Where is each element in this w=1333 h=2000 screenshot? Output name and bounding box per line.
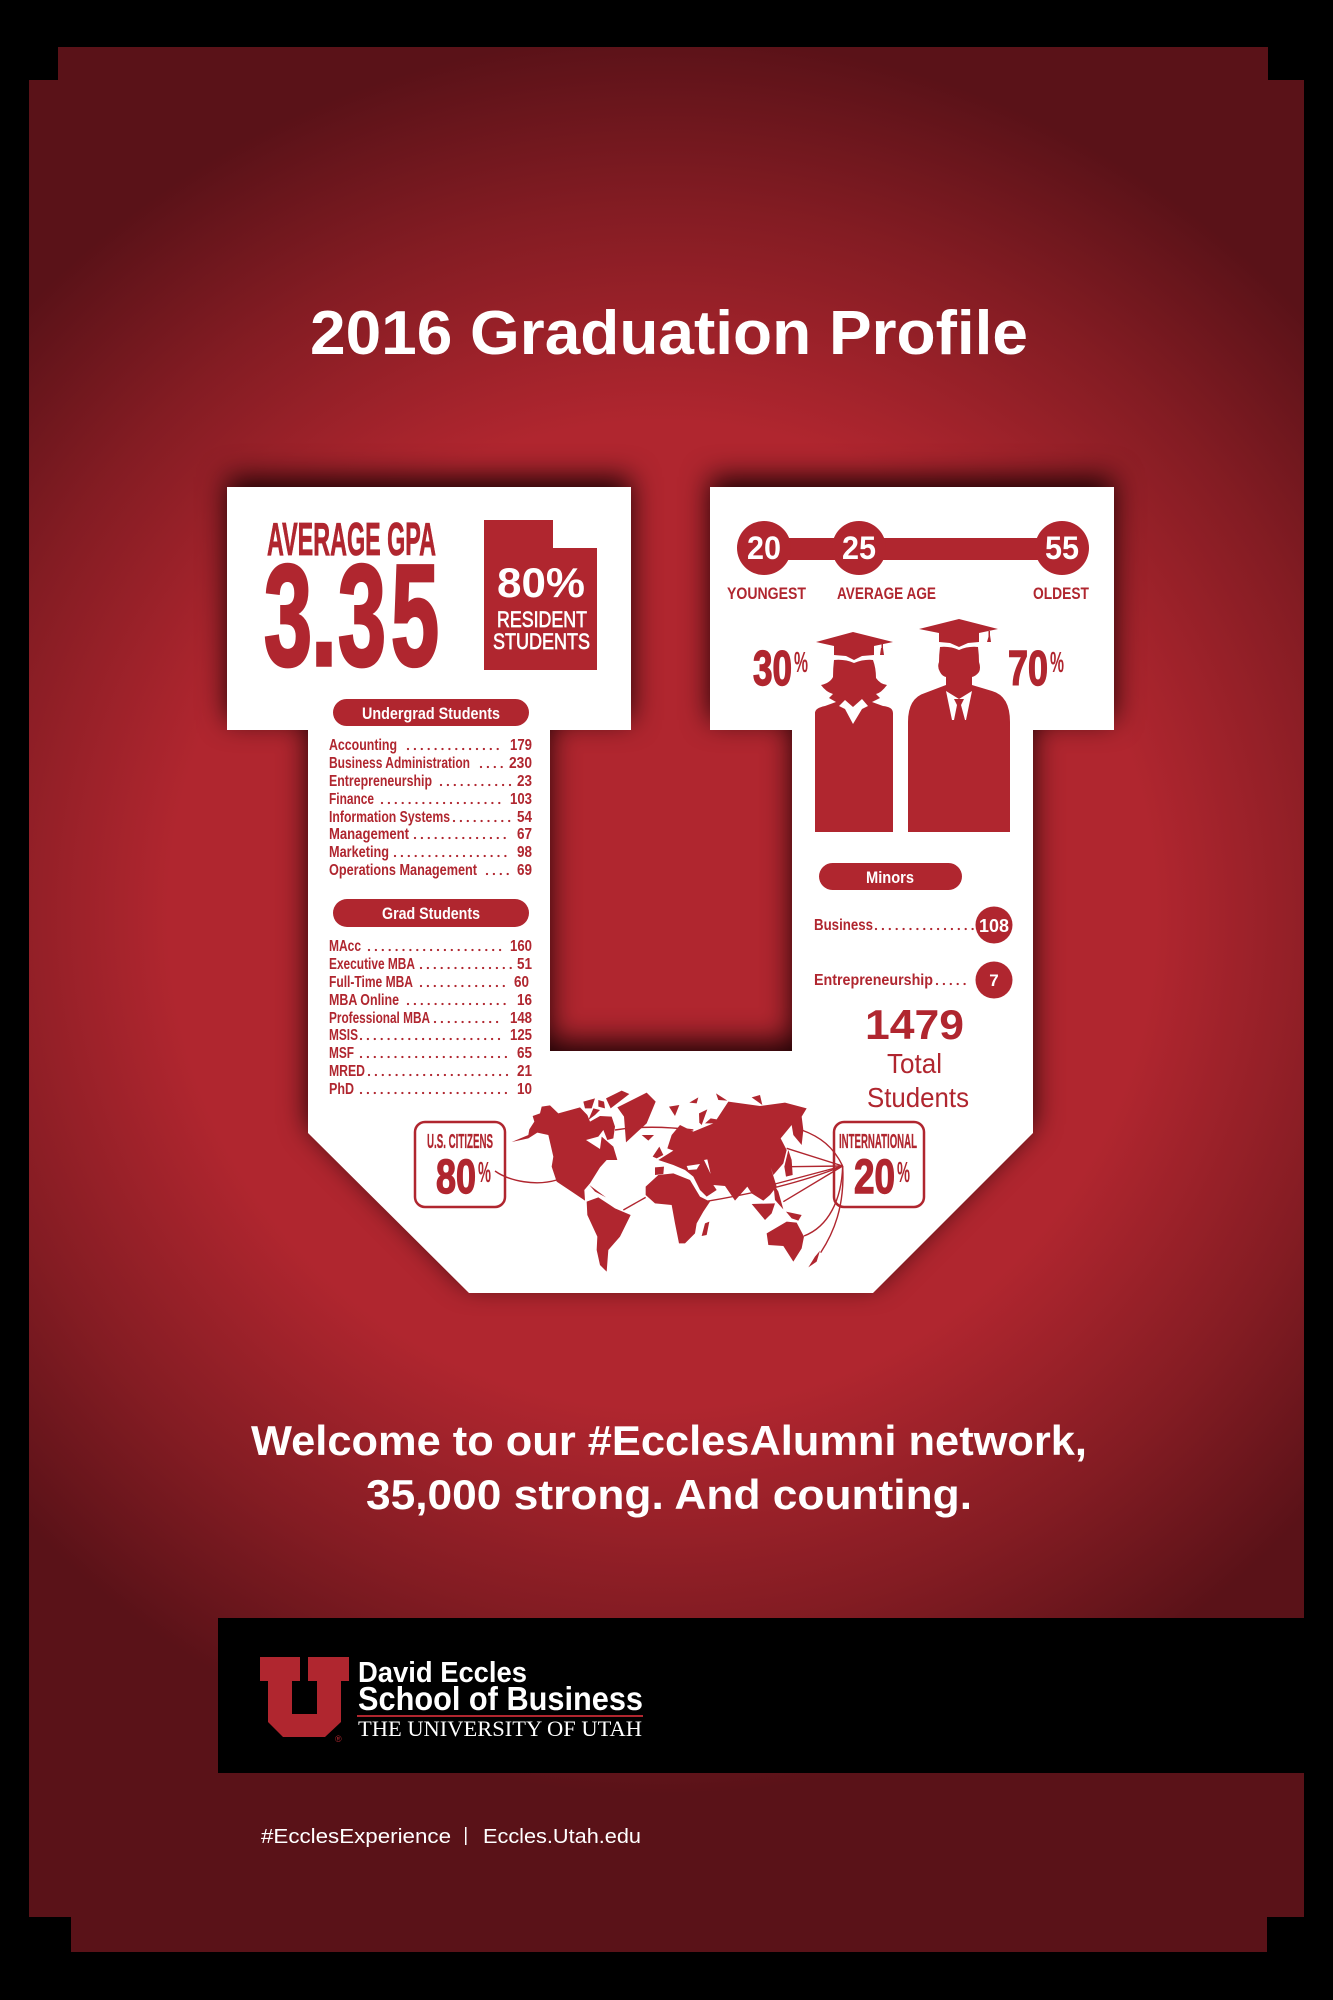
list: grad programs: 148 xyxy=(510,1010,532,1027)
list: undergrad majors: 69 xyxy=(517,862,532,879)
closing message: Welcome to our #EcclesAlumni network, xyxy=(251,1417,1087,1464)
icon: Utah state with resident students: STUDENTS xyxy=(493,629,590,654)
stat: GPA value: 3 xyxy=(338,535,386,696)
closing message xyxy=(251,1417,1087,1518)
chart: age timeline: AVERAGE AGE xyxy=(837,584,936,603)
chart: age timeline: 20 xyxy=(747,530,781,566)
list: undergrad majors: 98 xyxy=(517,844,532,861)
list: undergrad majors: Management xyxy=(329,826,409,843)
list: undergrad majors: 23 xyxy=(517,773,532,790)
list: minors: 108 xyxy=(979,916,1009,936)
list: undergrad majors: 67 xyxy=(517,826,532,843)
callout: international: INTERNATIONAL xyxy=(839,1131,917,1153)
callout: international xyxy=(834,1122,924,1207)
list: undergrad majors: 230 xyxy=(509,755,532,772)
logo wordmark xyxy=(357,1657,643,1741)
stat: 30% women: 30 xyxy=(753,642,792,696)
panel: U shape infographic xyxy=(227,487,1114,1293)
list: grad programs: Professional MBA xyxy=(329,1010,430,1027)
list: minors: Business xyxy=(814,917,873,934)
closing message: 35,000 strong. And counting. xyxy=(366,1471,972,1518)
title: 2016 Graduation Profile xyxy=(310,299,1028,368)
list: minors: Entrepreneurship xyxy=(814,972,933,989)
icon: university U logo xyxy=(260,1657,349,1744)
list: grad programs: MBA Online xyxy=(329,992,399,1009)
list: minors xyxy=(814,906,1012,998)
stat: 70% men: 70 xyxy=(1008,642,1048,696)
list: grad programs: 10 xyxy=(517,1081,532,1098)
heading: grad students: Grad Students xyxy=(382,904,480,923)
icon: Utah state with resident students xyxy=(484,520,597,670)
icon: female graduate xyxy=(815,632,893,832)
stat: GPA value xyxy=(264,535,439,696)
callout: U.S. citizens: 80 xyxy=(436,1151,476,1204)
list: undergrad majors: 54 xyxy=(517,809,532,826)
callout: international: % xyxy=(897,1157,910,1189)
panel: logo band xyxy=(218,1618,1304,1773)
list: undergrad majors: Information Systems xyxy=(329,809,450,826)
callout: U.S. citizens: U.S. CITIZENS xyxy=(427,1131,493,1153)
heading: undergrad students: Undergrad Students xyxy=(362,704,500,723)
list: grad programs: 160 xyxy=(510,938,532,955)
list: undergrad majors: 179 xyxy=(510,737,532,754)
footer links xyxy=(261,1826,641,1848)
callout: U.S. citizens: % xyxy=(478,1157,491,1189)
heading: average GPA: AVERAGE GPA xyxy=(267,513,436,565)
icon: Utah state with resident students: 80% xyxy=(497,559,585,606)
chart: world map with connection lines xyxy=(495,1091,843,1272)
logo wordmark: THE UNIVERSITY OF UTAH xyxy=(358,1716,642,1741)
list: undergrad majors: Finance xyxy=(329,791,374,808)
list: undergrad majors: Accounting xyxy=(329,737,397,754)
list: grad programs: 16 xyxy=(517,992,532,1009)
heading: minors: Minors xyxy=(866,868,914,887)
list: grad programs: 65 xyxy=(517,1045,532,1062)
stat: 70% men: % xyxy=(1050,647,1064,679)
list: grad programs: MAcc xyxy=(329,938,361,955)
stat: 30% women: % xyxy=(794,647,808,679)
list: grad programs: PhD xyxy=(329,1081,354,1098)
logo wordmark: David Eccles xyxy=(358,1657,527,1689)
stat: total students: 1479 xyxy=(865,1001,964,1048)
callout: U.S. citizens xyxy=(415,1122,505,1207)
chart: age timeline: 25 xyxy=(842,530,876,566)
chart: age timeline: YOUNGEST xyxy=(727,584,807,603)
chart: age timeline: OLDEST xyxy=(1033,584,1089,603)
logo wordmark: School of Business xyxy=(358,1680,643,1717)
list: grad programs: 125 xyxy=(510,1027,532,1044)
chart: age timeline: 55 xyxy=(1045,530,1079,566)
list: undergrad majors: Entrepreneurship xyxy=(329,773,432,790)
chart: age timeline xyxy=(727,521,1089,603)
icon: university U logo: ® xyxy=(335,1734,342,1744)
heading: undergrad students xyxy=(333,699,529,726)
list: grad programs: Full-Time MBA xyxy=(329,974,413,991)
icon: male graduate xyxy=(908,619,1010,832)
heading: minors xyxy=(819,863,962,890)
list: grad programs: 60 xyxy=(514,974,529,991)
stat: total students: Total xyxy=(887,1048,942,1079)
callout: international: 20 xyxy=(854,1151,895,1204)
icon: Utah state with resident students: RESIDENT xyxy=(497,607,587,632)
stat: total students: Students xyxy=(867,1082,969,1113)
list: grad programs xyxy=(329,938,532,1098)
list: undergrad majors: 103 xyxy=(510,791,532,808)
heading: grad students xyxy=(333,899,529,927)
stat: GPA value: 5 xyxy=(391,535,439,696)
footer links: #EcclesExperience xyxy=(261,1826,451,1848)
list: grad programs: Executive MBA xyxy=(329,956,415,973)
stat: GPA value: 3 xyxy=(264,535,312,696)
list: undergrad majors xyxy=(329,737,532,879)
list: undergrad majors: Business Administration xyxy=(329,755,470,772)
list: grad programs: 51 xyxy=(517,956,532,973)
list: undergrad majors: Operations Management xyxy=(329,862,477,879)
list: minors: 7 xyxy=(989,971,999,990)
list: grad programs: MSIS xyxy=(329,1027,358,1044)
list: grad programs: MRED xyxy=(329,1063,365,1080)
stat: GPA value: . xyxy=(311,535,337,696)
stat: total students xyxy=(865,1001,969,1113)
list: grad programs: MSF xyxy=(329,1045,354,1062)
list: undergrad majors: Marketing xyxy=(329,844,389,861)
footer links: Eccles.Utah.edu xyxy=(483,1826,641,1848)
list: grad programs: 21 xyxy=(517,1063,532,1080)
